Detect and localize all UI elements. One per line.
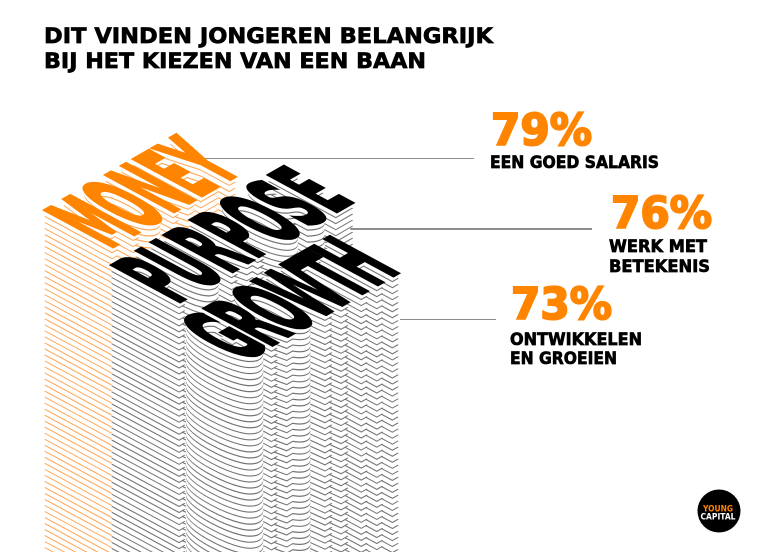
stat: 73% ontwikkelen en groeien: EN GROEIEN (510, 349, 617, 368)
stat: 76% werk met betekenis: BETEKENIS (609, 257, 710, 276)
stacked word: PURPOSE: PURPOSE (90, 154, 378, 316)
stat: 76% werk met betekenis: WERK MET (609, 237, 708, 256)
stat: 79% een goed salaris: EEN GOED SALARIS (490, 153, 659, 172)
stat: 73% ontwikkelen en groeien: ONTWIKKELEN (510, 330, 642, 349)
stat: 76% werk met betekenis (609, 188, 712, 276)
leader line: money to 79% (205, 158, 474, 159)
stat: 73% ontwikkelen en groeien: 73% (511, 279, 612, 330)
stat: 76% werk met betekenis: 76% (611, 188, 712, 239)
title: DIT VINDEN JONGEREN BELANGRIJK (44, 24, 495, 49)
leader line: growth to 73% (400, 319, 496, 320)
stacked word: MONEY: MONEY (23, 125, 266, 261)
title (44, 24, 495, 74)
leader line: purpose to 76% (350, 228, 592, 230)
logo: Young Capital: YOUNG (702, 504, 733, 514)
logo: Young Capital: CAPITAL (700, 512, 736, 522)
stat: 73% ontwikkelen en groeien (510, 279, 642, 368)
logo: Young Capital (698, 490, 740, 532)
stat: 79% een goed salaris (490, 105, 659, 172)
title: BIJ HET KIEZEN VAN EEN BAAN (44, 49, 426, 74)
stacked word: GROWTH: GROWTH (157, 226, 422, 374)
stat: 79% een goed salaris: 79% (491, 105, 592, 156)
